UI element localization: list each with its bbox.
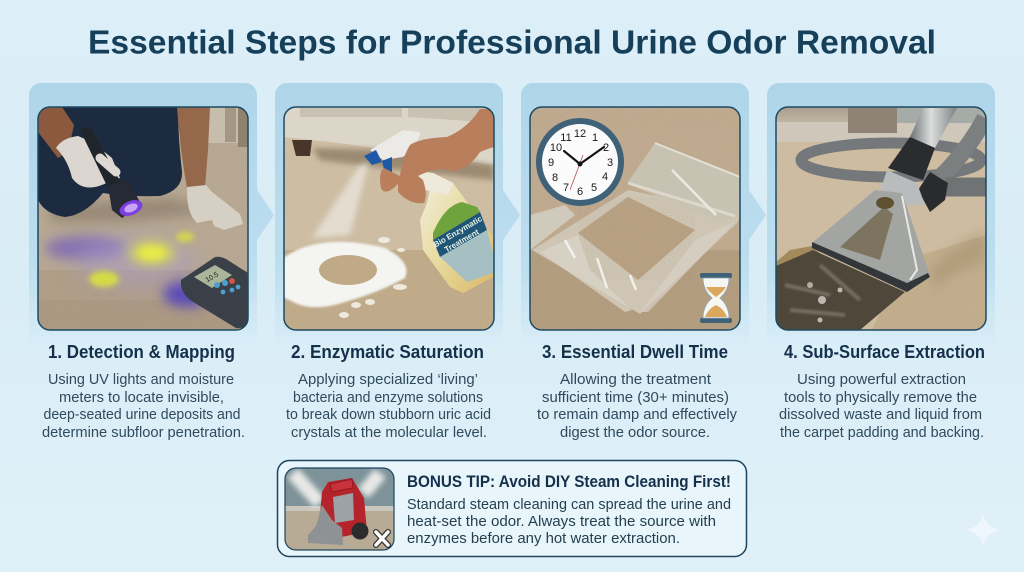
icon: wall clock: 2 [603, 142, 609, 154]
description [42, 372, 245, 441]
photo: UV inspection of carpet [38, 107, 248, 330]
panel: step 4 sub-surface extraction [767, 83, 995, 441]
photo: UV inspection of carpet: 10.5 [205, 271, 220, 284]
icon: wall clock: 8 [552, 172, 558, 184]
callout: bonus tip [278, 460, 746, 556]
description: crystals at the molecular level. [291, 425, 487, 441]
description [286, 372, 491, 441]
card background [275, 83, 520, 345]
panel: step 2 enzymatic saturation [275, 83, 520, 441]
description: sufficient time (30+ minutes) [542, 390, 729, 406]
bonus tip text: enzymes before any hot water extraction. [407, 530, 680, 547]
icon: wall clock: 1 [592, 132, 598, 144]
photo: extraction wand on carpet [776, 107, 986, 330]
description: Using UV lights and moisture [48, 372, 234, 388]
title: Essential Steps for Professional Urine Odor Removal [88, 24, 936, 60]
description: to remain damp and effectively [537, 407, 738, 423]
icon: wall clock [536, 118, 624, 206]
icon: X mark [376, 532, 388, 545]
description: Applying specialized ‘living’ [298, 372, 478, 388]
icon: hourglass [700, 273, 732, 323]
icon: wall clock: 3 [607, 157, 613, 169]
icon: wall clock: 5 [591, 182, 597, 194]
description: Using powerful extraction [797, 372, 966, 388]
description: the carpet padding and backing. [780, 425, 984, 441]
description: bacteria and enzyme solutions [293, 390, 483, 406]
bonus tip text: heat-set the odor. Always treat the source with [407, 513, 716, 530]
photo: spraying enzyme treatment: Bio Enzymatic [432, 214, 484, 249]
description: deep-seated urine deposits and [44, 407, 240, 423]
callout box [278, 460, 746, 556]
icon: wall clock: 4 [602, 171, 608, 183]
description: dissolved waste and liquid from [779, 407, 982, 423]
heading: 3. Essential Dwell Time [542, 342, 728, 362]
icon: wall clock: 10 [550, 142, 562, 154]
card background [767, 83, 995, 345]
icon: wall clock: 9 [548, 157, 554, 169]
description: to break down stubborn uric acid [286, 407, 491, 423]
description [537, 372, 738, 441]
icon: wall clock: 6 [577, 186, 583, 198]
heading: 1. Detection & Mapping [48, 342, 235, 362]
description: Allowing the treatment [560, 372, 711, 388]
icon: wall clock: 7 [563, 182, 569, 194]
bonus tip heading: BONUS TIP: Avoid DIY Steam Cleaning First! [407, 472, 731, 491]
description: tools to physically remove the [784, 390, 977, 406]
description: digest the odor source. [560, 425, 710, 441]
description [779, 372, 984, 441]
bonus tip text: Standard steam cleaning can spread the urine and [407, 496, 731, 513]
photo: steam cleaner with X mark [285, 468, 394, 550]
photo: spraying enzyme treatment: Treatment [443, 227, 481, 254]
panel: step 3 essential dwell time [521, 83, 766, 441]
photo: spraying enzyme treatment [283, 107, 494, 330]
heading: 2. Enzymatic Saturation [291, 342, 484, 362]
icon: wall clock: 11 [560, 132, 572, 144]
description: determine subfloor penetration. [42, 425, 245, 441]
icon: sparkle [966, 513, 1000, 547]
heading: 4. Sub-Surface Extraction [784, 342, 985, 362]
bonus tip text [407, 496, 731, 547]
card background [29, 83, 274, 345]
panel: step 1 detection and mapping [29, 83, 274, 441]
photo: carpet under plastic with clock [530, 107, 740, 330]
card background [521, 83, 766, 345]
icon: wall clock: 12 [574, 128, 586, 140]
description: meters to locate invisible, [59, 390, 224, 406]
